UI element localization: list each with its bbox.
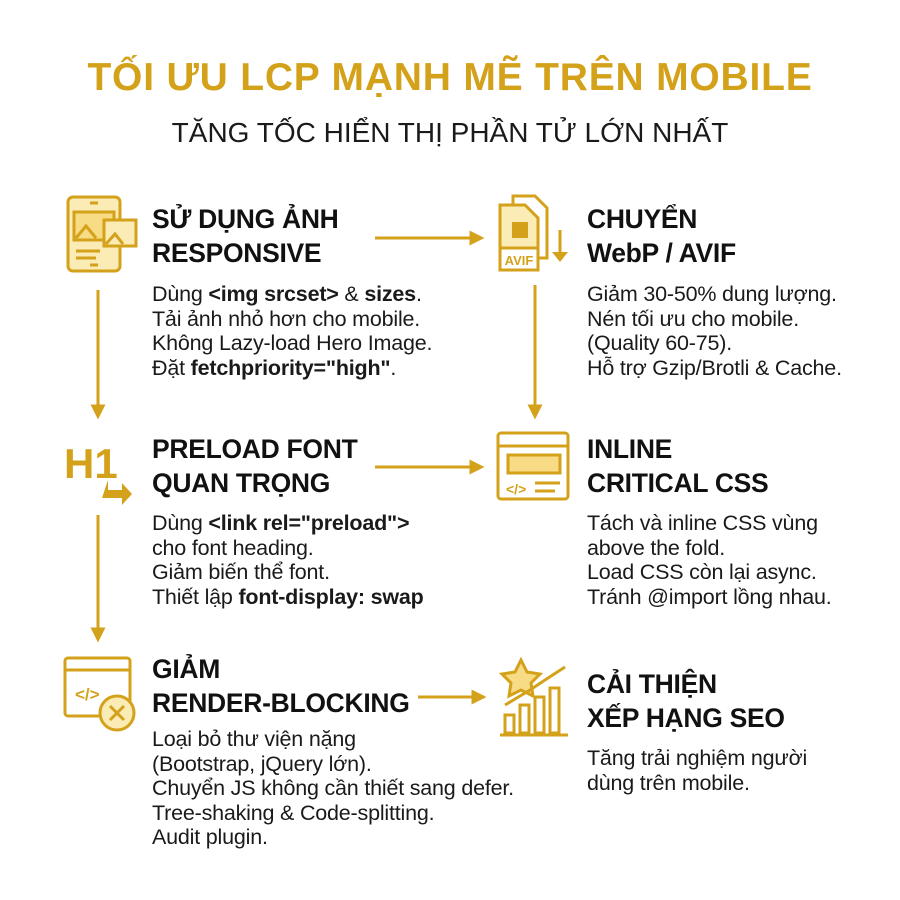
icon: render blocking [65, 658, 134, 730]
panel: inline css: CRITICAL CSS [587, 468, 768, 498]
panel: render blocking: Tree-shaking & Code-splitting. [152, 800, 434, 824]
icon: H1: H1 [64, 440, 118, 487]
panel: preload font: QUAN TRỌNG [152, 468, 330, 498]
icon: responsive images: </> [75, 685, 100, 704]
icon: code window [498, 433, 568, 499]
panel: preload font: cho font heading. [152, 536, 314, 560]
icon: SEO star chart [500, 660, 568, 735]
panel: render blocking: GIẢM [152, 654, 220, 684]
panel: responsive images: SỬ DỤNG ẢNH [152, 204, 339, 234]
panel: responsive images: Đặt fetchpriority="high". [152, 356, 396, 380]
panel: preload font: PRELOAD FONT [152, 434, 357, 464]
panel: render blocking: (Bootstrap, jQuery lớn). [152, 752, 372, 776]
panel: webp avif: (Quality 60-75). [587, 331, 732, 355]
panel: inline css: above the fold. [587, 536, 725, 560]
panel: render blocking: Audit plugin. [152, 825, 268, 849]
panel: render blocking: Loại bỏ thư viện nặng [152, 727, 356, 751]
panel: preload font: Dùng <link rel="preload"> [152, 511, 409, 535]
title: TỐI ƯU LCP MẠNH MẼ TRÊN MOBILE [87, 56, 813, 99]
panel: responsive images: Tải ảnh nhỏ hơn cho mobile. [152, 306, 420, 330]
panel: webp avif: Nén tối ưu cho mobile. [587, 306, 799, 330]
icon: avif file [500, 196, 560, 270]
panel: responsive images [152, 204, 432, 380]
panel: preload font [152, 434, 424, 608]
panel: seo: CẢI THIỆN [587, 669, 717, 699]
panel: inline css: Tách và inline CSS vùng [587, 511, 818, 535]
panel: webp avif [587, 204, 842, 380]
panel: seo: dùng trên mobile. [587, 770, 750, 794]
panel: render blocking: Chuyển JS không cần thiết sang defer. [152, 776, 514, 800]
panel: responsive images: Dùng <img srcset> & sizes. [152, 282, 422, 306]
panel: render blocking: RENDER-BLOCKING [152, 688, 410, 718]
panel: webp avif: Giảm 30-50% dung lượng. [587, 282, 837, 306]
panel: webp avif: CHUYỂN [587, 204, 697, 234]
icon: responsive images: AVIF [505, 253, 533, 268]
panel: seo [587, 668, 807, 794]
panel: preload font: Giảm biến thể font. [152, 560, 330, 584]
icon: responsive images: </> [506, 481, 526, 497]
panel: seo: Tăng trải nghiệm người [587, 746, 807, 770]
panel: responsive images: RESPONSIVE [152, 238, 321, 268]
panel: responsive images: Không Lazy-load Hero Image. [152, 331, 432, 355]
subtitle: TĂNG TỐC HIỂN THỊ PHẦN TỬ LỚN NHẤT [172, 117, 728, 148]
panel: inline css: Tránh @import lồng nhau. [587, 584, 832, 608]
panel: inline css: INLINE [587, 434, 672, 464]
panel: preload font: Thiết lập font-display: swap [152, 584, 424, 608]
panel: seo: XẾP HẠNG SEO [587, 703, 785, 733]
panel: inline css: Load CSS còn lại async. [587, 560, 817, 584]
panel: render blocking [152, 654, 514, 849]
panel: webp avif: WebP / AVIF [587, 238, 736, 268]
panel: inline css [587, 434, 832, 608]
panel: webp avif: Hỗ trợ Gzip/Brotli & Cache. [587, 356, 842, 380]
